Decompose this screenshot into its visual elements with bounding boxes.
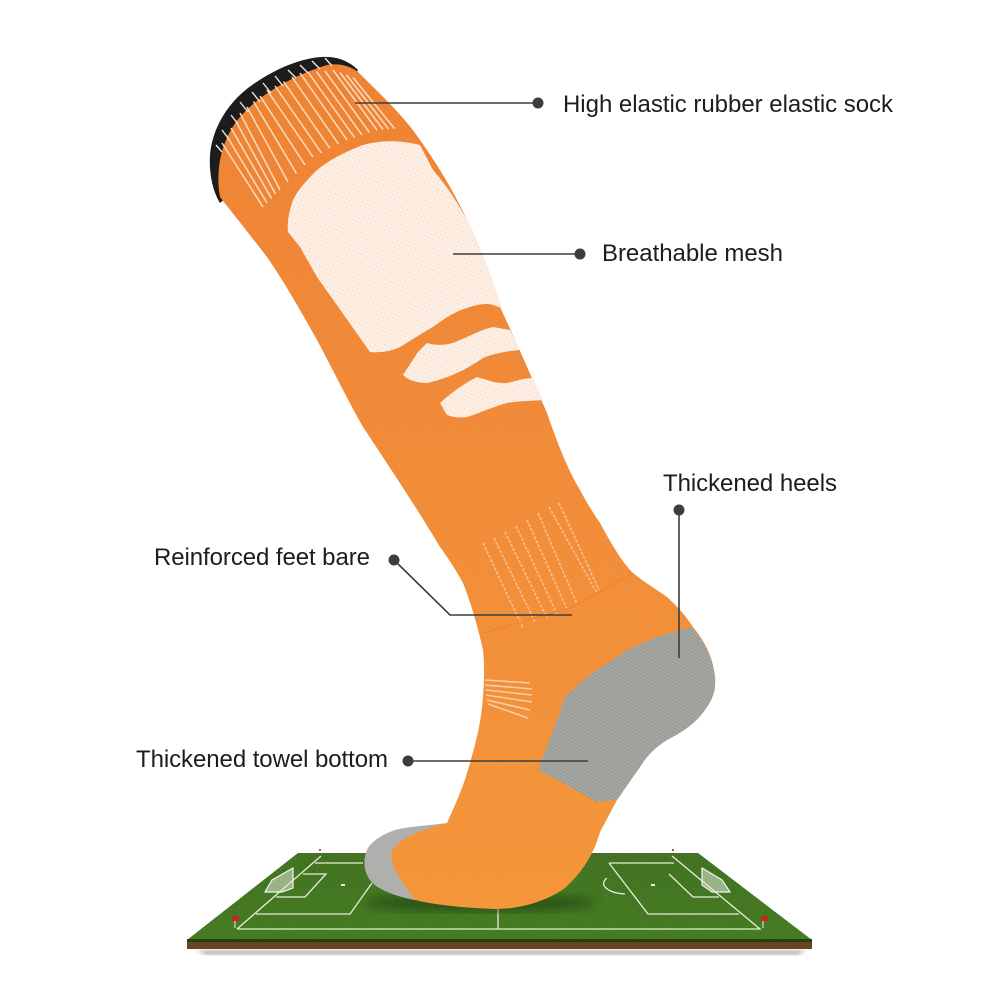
callout: high elastic rubber — [355, 91, 894, 118]
ankle band seam — [483, 573, 633, 633]
callout: thickened towel bottom — [136, 746, 588, 773]
dot — [532, 98, 544, 108]
leader line — [408, 760, 588, 762]
knit texture — [234, 72, 712, 850]
soil edge — [187, 940, 812, 949]
callout: breathable mesh — [453, 240, 783, 267]
label: High elastic rubber elastic sock — [563, 91, 894, 118]
dot — [388, 554, 400, 566]
goals — [265, 868, 730, 892]
label: Breathable mesh — [602, 240, 783, 267]
dot — [402, 756, 414, 766]
leader line — [355, 102, 538, 104]
sock contact shadow — [365, 894, 595, 912]
dot — [574, 248, 586, 260]
leader line — [394, 560, 572, 615]
pitch markings — [237, 856, 760, 929]
gray heel — [538, 627, 715, 802]
calf ribbed stripes — [483, 503, 599, 628]
ankle side stripes — [485, 680, 532, 718]
label: Thickened towel bottom — [136, 746, 388, 773]
corner flags — [232, 849, 768, 928]
infographic canvas — [136, 56, 893, 956]
mesh band upper — [403, 327, 520, 383]
pitch shadow — [196, 950, 806, 955]
leader line — [453, 253, 580, 255]
football pitch base — [187, 849, 812, 955]
grass fringe — [187, 939, 812, 942]
callout: thickened heels — [663, 470, 837, 658]
dot — [674, 504, 684, 516]
cuff white stripes — [222, 70, 394, 207]
sock body — [218, 64, 715, 909]
black cuff rim — [210, 57, 358, 203]
label: Reinforced feet bare — [154, 544, 370, 571]
label: Thickened heels — [663, 470, 837, 497]
gray toe — [364, 823, 447, 900]
sock illustration — [200, 50, 730, 920]
callout: reinforced feet bare — [154, 544, 572, 615]
leader line — [678, 511, 680, 658]
breathable mesh panel — [288, 141, 502, 352]
penalty spots — [341, 884, 655, 886]
grass surface — [187, 853, 812, 940]
cuff rim stripes — [216, 58, 332, 152]
mesh band lower — [440, 377, 543, 417]
heel knit shading — [538, 627, 715, 802]
